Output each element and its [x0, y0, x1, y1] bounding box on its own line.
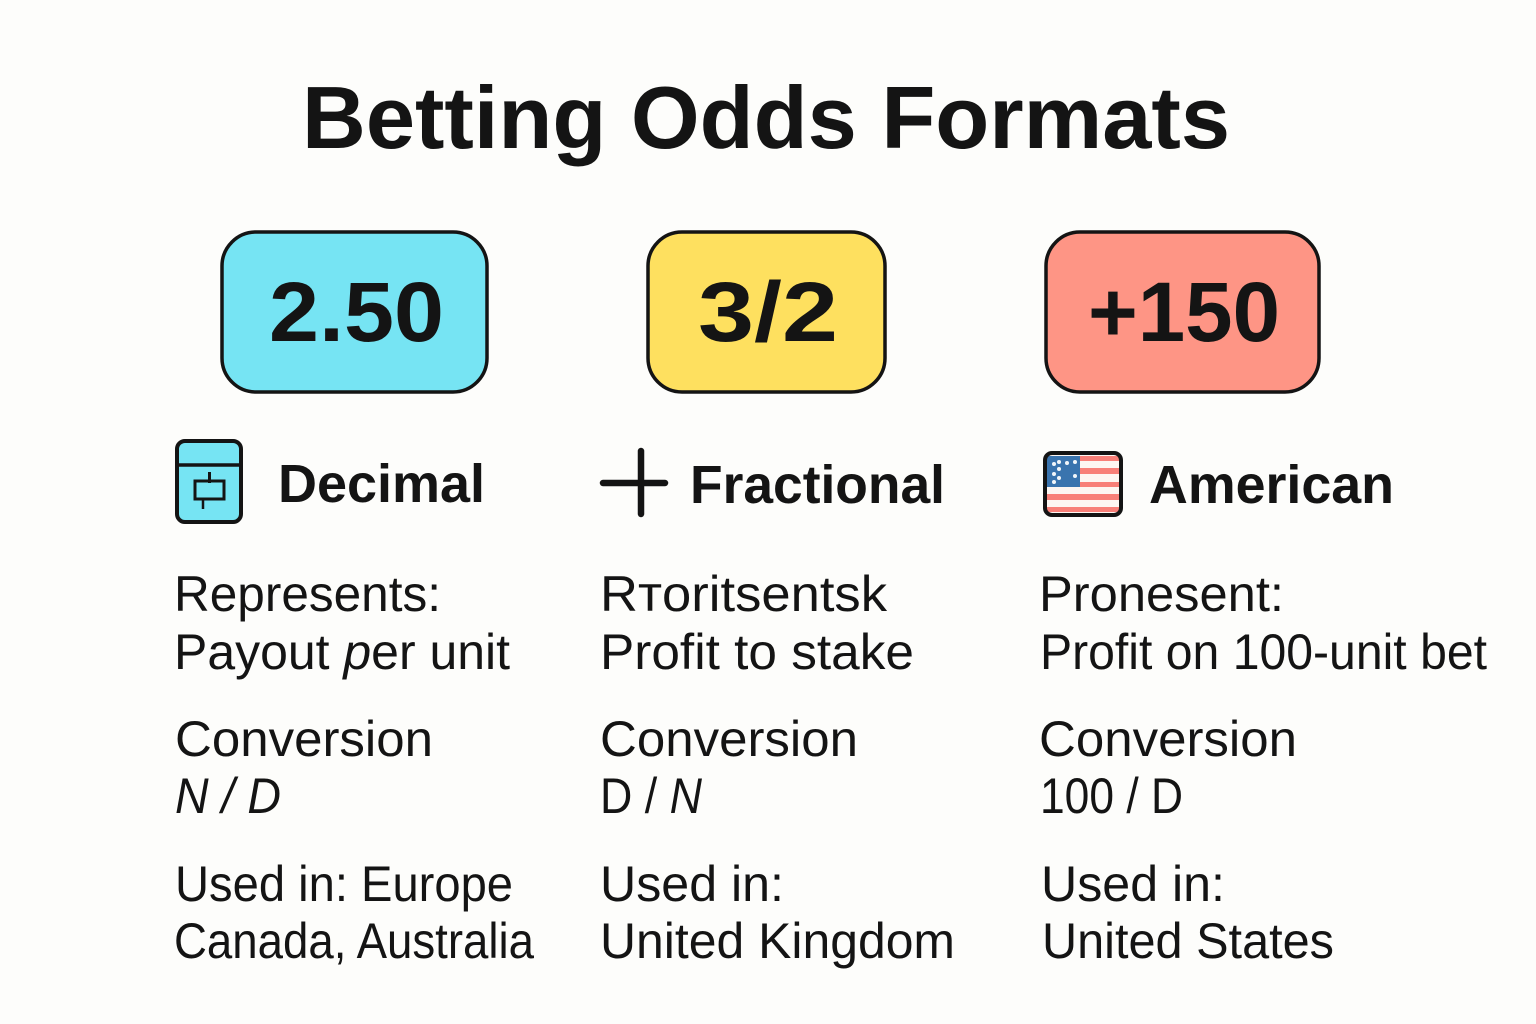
odds badge: +150: +150 [1088, 265, 1280, 359]
icon: decimal calculator [177, 441, 241, 522]
text: represents: Rтoritsentsk [600, 566, 888, 622]
text: conversion [175, 711, 433, 824]
text: conversion [1039, 711, 1297, 824]
column: fractional [600, 232, 955, 969]
text: represents: Profit on 100-unit bet [1040, 624, 1487, 680]
text: used in [174, 856, 534, 969]
text: used in: Used in: [600, 856, 784, 912]
text: used in: United States [1042, 913, 1334, 969]
text: represents: Payout per unit [174, 624, 510, 680]
text: conversion [600, 711, 858, 824]
icon: plus sign [603, 451, 665, 514]
heading: Fractional: Fractional [690, 455, 945, 515]
text: represents: Pronesent: [1039, 566, 1284, 622]
text: represents: Profit to stake [600, 624, 914, 680]
odds badge: 2.50: 2.50 [269, 265, 444, 359]
heading: American: American [1149, 455, 1394, 515]
text: represents: Represents: [174, 566, 441, 622]
text: used in: United Kingdom [600, 913, 955, 969]
odds badge: 3/2: 3/2 [698, 265, 838, 359]
column: decimal [174, 232, 534, 969]
odds badge: +150 [1046, 232, 1319, 392]
text: conversion: 100 / D [1040, 768, 1183, 824]
icon: american flag [1045, 453, 1121, 515]
text: used in: Used in: [1041, 856, 1225, 912]
odds badge: 3/2 [648, 232, 885, 392]
text: represents [1039, 566, 1487, 680]
text: conversion: Conversion [600, 711, 858, 767]
odds badge: 2.50 [222, 232, 487, 392]
title: Betting Odds Formats [302, 68, 1230, 167]
text: represents [174, 566, 510, 680]
text: used in [1041, 856, 1334, 969]
text: conversion: Conversion [1039, 711, 1297, 767]
text: represents [600, 566, 914, 680]
text: used in [600, 856, 955, 969]
text: conversion: D / N [600, 768, 703, 824]
text: conversion: Conversion [175, 711, 433, 767]
heading: Decimal: Decimal [278, 454, 485, 514]
text: used in: Canada, Australia [174, 913, 534, 969]
text: conversion: N / D [175, 768, 281, 824]
column: american [1039, 232, 1487, 969]
text: used in: Used in: Europe [175, 856, 513, 912]
